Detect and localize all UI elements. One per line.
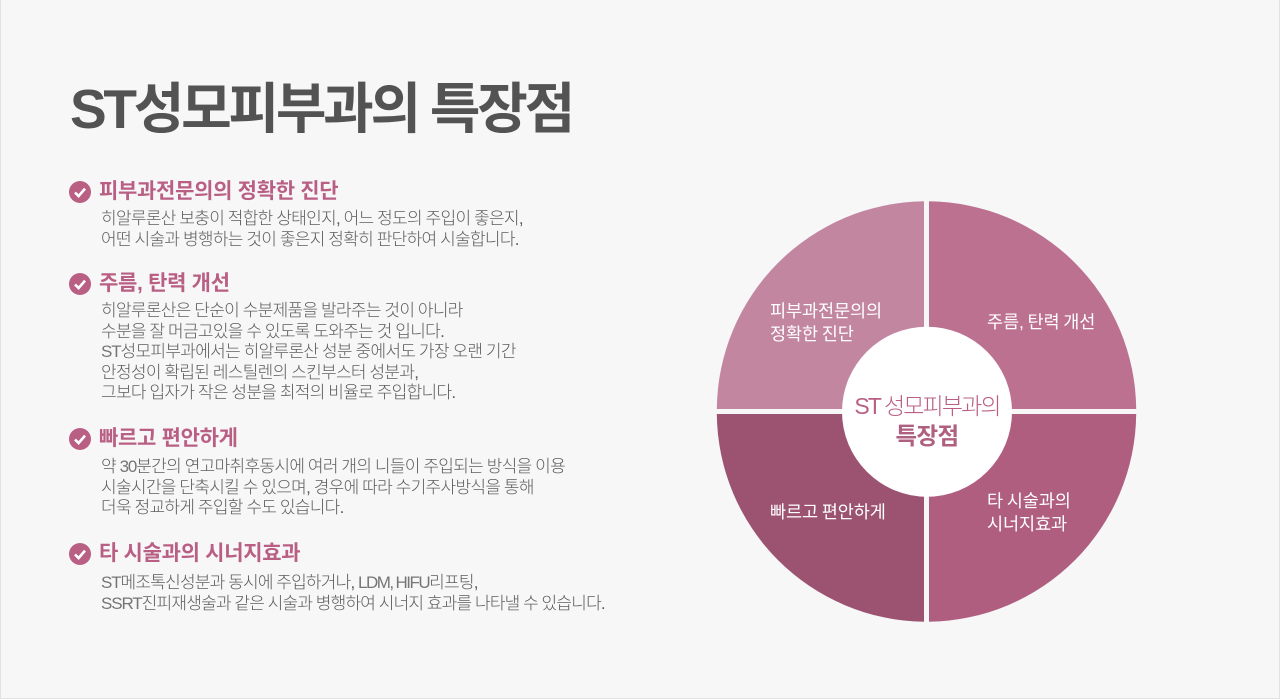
segment: top right bbox=[929, 201, 1136, 409]
text: feature 2: 안정성이 확립된 레스틸렌의 스킨부스터 성분과, bbox=[101, 363, 418, 382]
center label: subtitle: ST 성모피부과의 bbox=[854, 393, 1000, 419]
text: feature 1 bbox=[101, 209, 523, 249]
heading: feature 2: 주름, 탄력 개선 bbox=[99, 272, 230, 295]
text: feature 2: 히알루론산은 단순이 수분제품을 발라주는 것이 아니라 bbox=[101, 301, 463, 320]
icon: check badge 1 bbox=[69, 181, 91, 203]
panel: feature 1 bbox=[69, 180, 523, 249]
label: bottom right segment: 시너지효과 bbox=[987, 514, 1067, 534]
heading: feature 1: 피부과전문의의 정확한 진단 bbox=[99, 180, 338, 203]
label: top left segment: 정확한 진단 bbox=[770, 324, 854, 344]
text: feature 3: 약 30분간의 연고마취후동시에 여러 개의 니들이 주입되는 방식을 이용 bbox=[101, 457, 565, 476]
label: top left segment bbox=[770, 301, 882, 344]
text: feature 2 bbox=[101, 301, 516, 402]
text: feature 4: SSRT진피재생술과 같은 시술과 병행하여 시너지 효과를 나타낼 수 있습니다. bbox=[101, 594, 605, 613]
text: feature 3: 더욱 정교하게 주입할 수도 있습니다. bbox=[101, 498, 344, 517]
label: top left segment: 피부과전문의의 bbox=[770, 301, 882, 321]
text: feature 4: ST메조톡신성분과 동시에 주입하거나, LDM, HIFU리프팅, bbox=[101, 573, 478, 592]
label: bottom left segment: 빠르고 편안하게 bbox=[770, 502, 886, 522]
text: feature 1: 히알루론산 보충이 적합한 상태인지, 어느 정도의 주입이 좋은지, bbox=[101, 209, 523, 228]
label: bottom right segment: 타 시술과의 bbox=[987, 491, 1071, 511]
text: feature 1: 어떤 시술과 병행하는 것이 좋은지 정확히 판단하여 시술합니다. bbox=[101, 230, 519, 249]
label: top right segment: 주름, 탄력 개선 bbox=[987, 312, 1095, 332]
heading: feature 4: 타 시술과의 시너지효과 bbox=[99, 542, 300, 565]
label: bottom right segment bbox=[987, 491, 1071, 534]
text: feature 2: 그보다 입자가 작은 성분을 최적의 비율로 주입합니다. bbox=[101, 383, 455, 402]
text: feature 4 bbox=[101, 573, 605, 613]
panel: feature 3 bbox=[69, 427, 565, 517]
panel: feature 2 bbox=[69, 272, 516, 402]
center circle bbox=[842, 327, 1012, 497]
icon: check badge 3 bbox=[69, 428, 91, 450]
text: feature 2: ST성모피부과에서는 히알루론산 성분 중에서도 가장 오랜 기간 bbox=[101, 342, 516, 361]
center label: title: 특장점 bbox=[895, 423, 959, 449]
heading: feature 3: 빠르고 편안하게 bbox=[99, 427, 238, 450]
chart: four-quadrant circle diagram bbox=[716, 201, 1136, 622]
segment: bottom left bbox=[717, 414, 924, 622]
icon: check badge 2 bbox=[69, 273, 91, 295]
icon: check badge 4 bbox=[69, 543, 91, 565]
segment: bottom right bbox=[929, 414, 1136, 622]
panel: feature 4 bbox=[69, 542, 605, 613]
text: feature 3 bbox=[101, 457, 565, 517]
text: feature 2: 수분을 잘 머금고있을 수 있도록 도와주는 것 입니다. bbox=[101, 322, 444, 341]
title: ST성모피부과의 특장점 bbox=[70, 78, 572, 140]
text: feature 3: 시술시간을 단축시킬 수 있으며, 경우에 따라 수기주사방식을 통해 bbox=[101, 478, 534, 497]
segment: top left bbox=[717, 201, 924, 409]
